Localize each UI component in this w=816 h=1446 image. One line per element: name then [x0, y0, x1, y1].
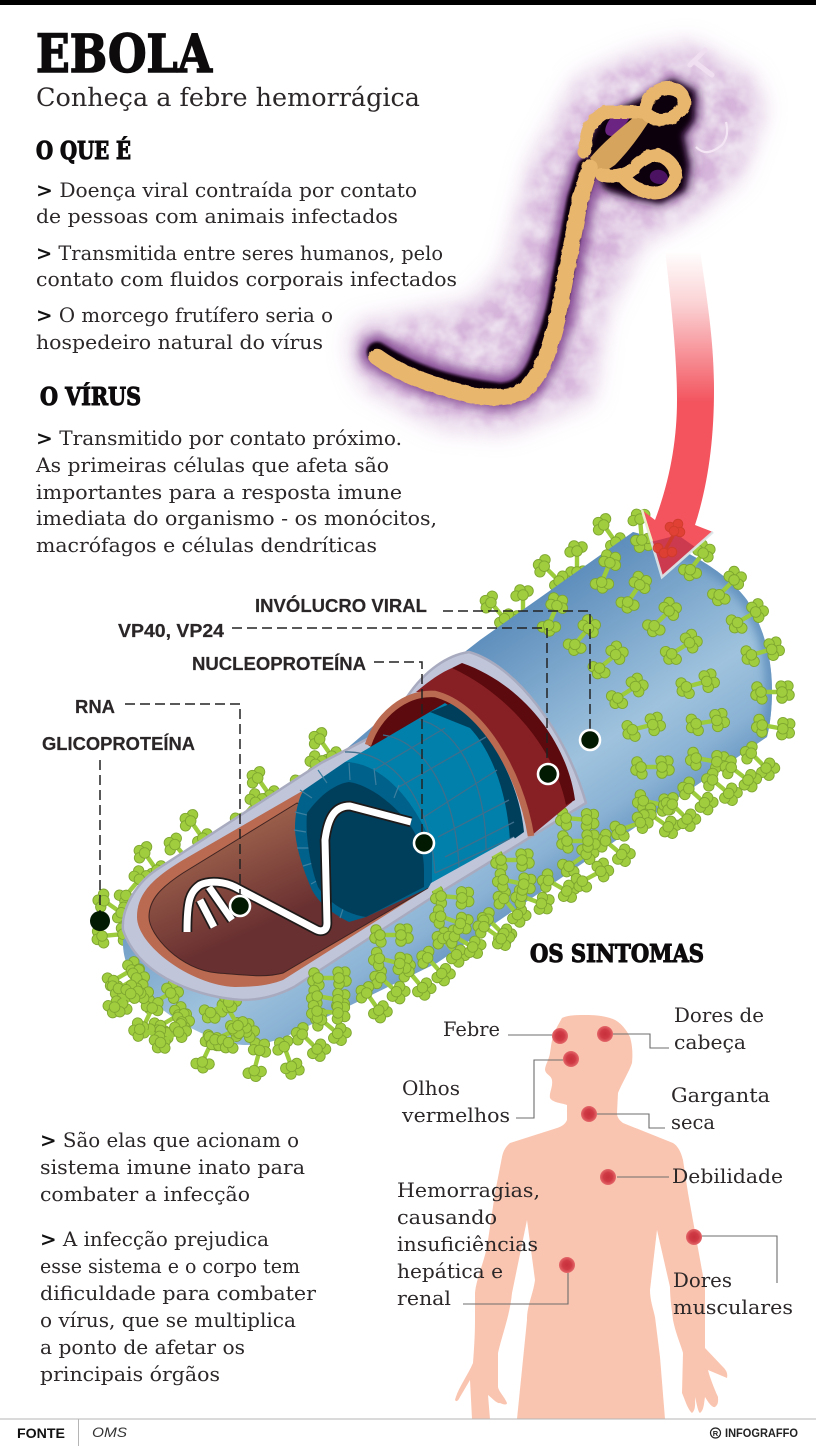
footer: OMS: [92, 1424, 128, 1440]
matrix protein shell: [416, 668, 572, 836]
label: nucleoproteína: NUCLEOPROTEÍNA: [192, 653, 366, 674]
shell outer maroon: [452, 663, 575, 805]
text block: o que é: contato com fluidos corporais infectados: [36, 267, 457, 291]
text block: sistema imune: sistema imune inato para: [40, 1155, 305, 1179]
envelope body: [123, 532, 772, 1045]
symptom: hemorragias: renal: [397, 1286, 451, 1310]
symptom: febre: Febre: [443, 1017, 500, 1041]
text block: sistema imune: a ponto de afetar os: [40, 1335, 245, 1359]
text block: o que é: [36, 178, 457, 354]
symptom: garganta seca: [581, 1083, 770, 1134]
salmon membrane band: [137, 790, 430, 987]
symptom: dores musculares: Dores: [673, 1268, 732, 1292]
subtitle: Conheça a febre hemorrágica: [36, 83, 420, 112]
text block: o vírus: importantes para a resposta imune: [36, 480, 402, 504]
capsid blocks: [345, 703, 514, 890]
envelope cut rim: [123, 652, 586, 1000]
human body silhouette: [455, 1015, 727, 1419]
label: vp40, vp24: [118, 621, 558, 784]
footer: [0, 1419, 816, 1446]
virus diagram: [89, 250, 797, 1084]
brown interior: [149, 803, 428, 976]
symptom: febre: [443, 1017, 568, 1044]
heading: o vírus: O VÍRUS: [40, 382, 141, 411]
text block: sistema imune: dificuldade para combater: [40, 1281, 316, 1305]
symptom: hemorragias: hepática e: [397, 1259, 503, 1283]
virus micrograph: [352, 45, 762, 430]
text block: o que é: > O morcego frutífero seria o: [36, 303, 333, 327]
RNA strand: [187, 806, 411, 932]
salmon inner lower strip: [424, 837, 517, 896]
label: glicoproteína: GLICOPROTEÍNA: [42, 733, 195, 754]
spikes on the envelope: [99, 508, 797, 1084]
capsid grid: [345, 720, 514, 873]
label: vp40, vp24: VP40, VP24: [118, 621, 224, 641]
symptom: dores de cabeça: Dores de: [674, 1003, 764, 1027]
title: EBOLA: [36, 24, 213, 85]
symptom: dores musculares: [673, 1229, 793, 1319]
spikes behind the body: [89, 510, 632, 949]
symptom: olhos vermelhos: [401, 1051, 579, 1127]
capsid face: [307, 782, 424, 917]
capsid ring: [295, 762, 432, 922]
symptom: garganta seca: Garganta: [671, 1083, 770, 1107]
text block: o que é: de pessoas com animais infectados: [36, 204, 398, 228]
footer: FONTE: [17, 1425, 65, 1441]
text block: sistema imune: o vírus, que se multiplica: [40, 1308, 296, 1332]
heading: os sintomas: OS SINTOMAS: [530, 939, 704, 968]
symptom: dores musculares: musculares: [673, 1295, 793, 1319]
symptom: olhos vermelhos: Olhos: [402, 1076, 460, 1100]
text block: o que é: hospedeiro natural do vírus: [36, 330, 323, 354]
footer: INFOGRAFFO: [725, 1428, 798, 1440]
text block: o vírus: > Transmitido por contato próximo.: [36, 426, 402, 450]
label: glicoproteína: [42, 733, 195, 931]
symptom: hemorragias: Hemorragias,: [397, 1178, 540, 1202]
top bar: [0, 0, 816, 5]
symptom: hemorragias: [397, 1178, 575, 1310]
symptom: dores de cabeça: [597, 1003, 764, 1054]
label: rna: [75, 697, 250, 916]
label: invólucro viral: INVÓLUCRO VIRAL: [255, 595, 427, 616]
maroon under the arch: [368, 694, 452, 750]
symptom: dores de cabeça: cabeça: [674, 1030, 746, 1054]
text block: o vírus: macrófagos e células dendríticas: [36, 533, 377, 557]
symptom: garganta seca: seca: [671, 1110, 715, 1134]
label: rna: RNA: [75, 697, 115, 717]
spikes over the rim: [305, 806, 600, 1026]
red arrow: [642, 250, 714, 577]
text block: o que é: > Doença viral contraída por contato: [36, 178, 417, 202]
text block: sistema imune: > A infecção prejudica: [40, 1227, 269, 1251]
text block: o vírus: As primeiras células que afeta são: [35, 453, 389, 477]
text block: o vírus: imediata do organismo - os monócitos,: [36, 506, 437, 530]
capsid dark band: [430, 703, 524, 842]
text block: sistema imune: principais órgãos: [40, 1362, 220, 1386]
salmon arch: [368, 694, 531, 836]
capsid ring ticks: [294, 763, 399, 918]
text block: sistema imune: esse sistema e o corpo tem: [40, 1254, 300, 1278]
label: nucleoproteína: [192, 653, 434, 853]
symptom: hemorragias: insuficiências: [397, 1232, 538, 1256]
symptom: olhos vermelhos: vermelhos: [401, 1103, 510, 1127]
text block: o que é: > Transmitida entre seres humanos, pelo: [36, 241, 443, 265]
symptom: hemorragias: causando: [397, 1205, 497, 1229]
text block: sistema imune: > São elas que acionam o: [40, 1128, 299, 1152]
symptom: debilidade: [600, 1164, 783, 1188]
text block: o vírus: [35, 426, 437, 557]
label: invólucro viral: [255, 595, 600, 750]
text block: sistema imune: combater a infecção: [40, 1182, 250, 1206]
footer: R: [713, 1429, 719, 1438]
text block: sistema imune: [40, 1128, 316, 1386]
symptom: debilidade: Debilidade: [672, 1164, 783, 1188]
heading: o que é: O QUE É: [36, 136, 131, 165]
